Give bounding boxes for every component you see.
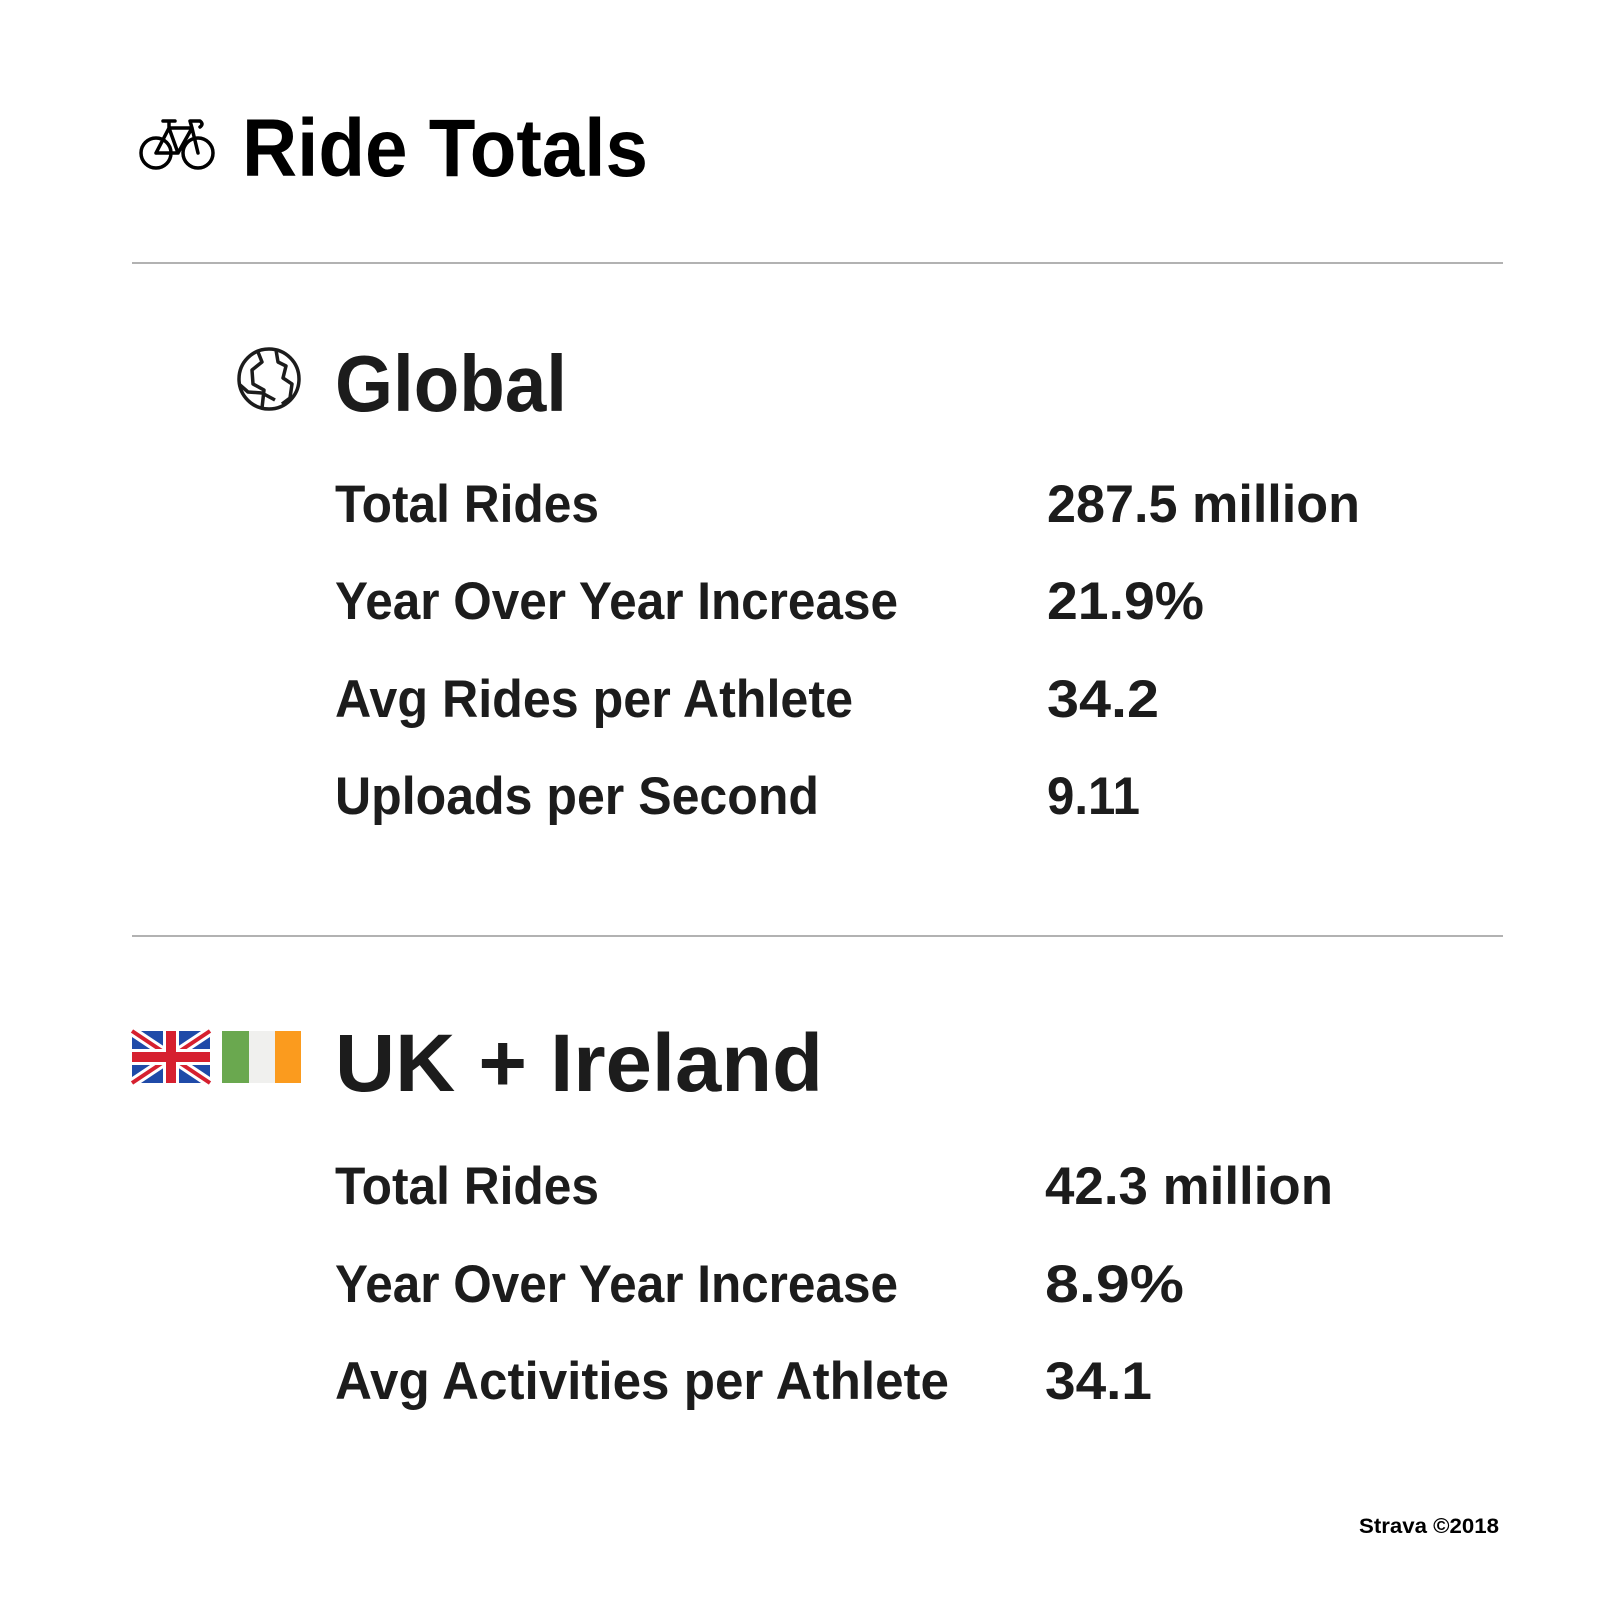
- global stats: 21.9%: [1047, 572, 1204, 631]
- icon: Ireland flag: [222, 1031, 301, 1083]
- title: Ride Totals: [242, 103, 648, 194]
- global stats: Avg Rides per Athlete: [335, 670, 853, 729]
- heading: UK + Ireland: UK + Ireland: [335, 1018, 823, 1109]
- UK stats: [335, 1157, 1333, 1411]
- footer credit: Strava ©2018: [1359, 1515, 1499, 1538]
- UK stats: Avg Activities per Athlete: [335, 1352, 949, 1411]
- icon: globe: [239, 349, 299, 409]
- global stats: Total Rides: [335, 475, 599, 534]
- icon: bicycle: [141, 121, 213, 168]
- UK stats: 8.9%: [1045, 1255, 1184, 1314]
- global stats: Year Over Year Increase: [335, 572, 898, 631]
- global stats: 9.11: [1047, 767, 1140, 826]
- UK stats: 42.3 million: [1045, 1157, 1333, 1216]
- heading: Global: Global: [335, 339, 567, 428]
- global stats: Uploads per Second: [335, 767, 819, 826]
- global stats: 287.5 million: [1047, 475, 1360, 534]
- UK stats: Total Rides: [335, 1157, 599, 1216]
- icon: UK flag: [132, 1031, 210, 1083]
- global stats: 34.2: [1047, 670, 1159, 729]
- UK stats: 34.1: [1045, 1352, 1152, 1411]
- UK stats: Year Over Year Increase: [335, 1255, 898, 1314]
- global stats: [335, 475, 1360, 826]
